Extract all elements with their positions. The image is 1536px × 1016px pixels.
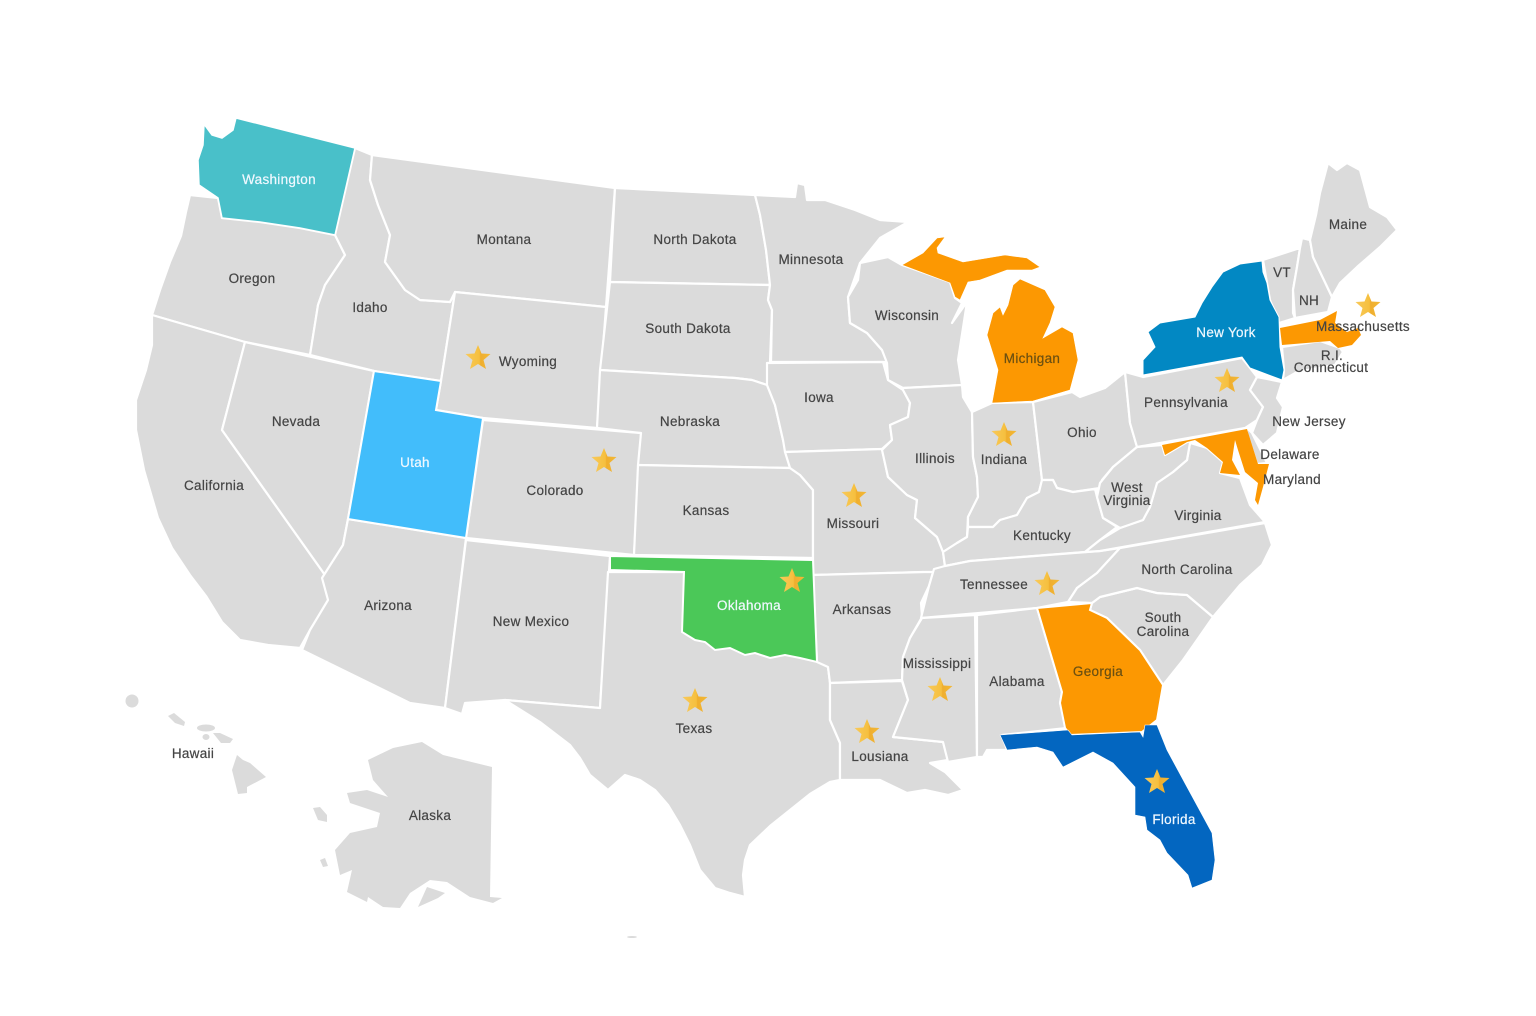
state labels: New York bbox=[1196, 325, 1256, 340]
state labels: Nevada bbox=[272, 414, 320, 429]
state labels: Indiana bbox=[981, 452, 1027, 467]
state labels: Oregon bbox=[229, 271, 275, 286]
state labels: Arkansas bbox=[833, 602, 891, 617]
state labels: Pennsylvania bbox=[1144, 395, 1228, 410]
state labels: Carolina bbox=[1137, 624, 1190, 639]
state labels: South bbox=[1145, 610, 1181, 625]
state labels: Virginia bbox=[1103, 493, 1151, 508]
state labels: New Jersey bbox=[1272, 414, 1346, 429]
state labels: Maine bbox=[1329, 217, 1367, 232]
state labels: NH bbox=[1299, 293, 1319, 308]
state labels: Hawaii bbox=[172, 746, 214, 761]
state labels: Alaska bbox=[409, 808, 451, 823]
state labels: VT bbox=[1273, 265, 1291, 280]
state labels: Lousiana bbox=[851, 749, 909, 764]
state labels: Colorado bbox=[526, 483, 584, 498]
state labels: Texas bbox=[676, 721, 712, 736]
state labels: Ohio bbox=[1067, 425, 1097, 440]
state labels: Idaho bbox=[352, 300, 388, 315]
state labels: Nebraska bbox=[660, 414, 720, 429]
stars bbox=[466, 293, 1380, 793]
state labels: North Dakota bbox=[653, 232, 737, 247]
state: Georgia bbox=[1037, 603, 1163, 735]
state: Massachusetts bbox=[1280, 311, 1361, 348]
state labels: Connecticut bbox=[1294, 360, 1368, 375]
state labels: New Mexico bbox=[493, 614, 569, 629]
state labels: Washington bbox=[242, 172, 316, 187]
state: Utah bbox=[348, 371, 483, 538]
state labels: South Dakota bbox=[645, 321, 731, 336]
state labels: Georgia bbox=[1073, 664, 1123, 679]
states: neutral gray bbox=[136, 148, 1397, 897]
state labels: Missouri bbox=[827, 516, 879, 531]
state labels: Delaware bbox=[1260, 447, 1320, 462]
state: Maryland bbox=[1162, 429, 1269, 505]
state: Oklahoma bbox=[610, 556, 817, 662]
state labels: Virginia bbox=[1174, 508, 1222, 523]
state labels: Michigan bbox=[1004, 351, 1060, 366]
state labels: Kentucky bbox=[1013, 528, 1071, 543]
state labels: Wisconsin bbox=[875, 308, 939, 323]
state labels: Montana bbox=[477, 232, 532, 247]
state: Florida bbox=[1000, 725, 1215, 888]
state: Michigan bbox=[902, 237, 1078, 403]
state labels: Mississippi bbox=[903, 656, 971, 671]
state labels: Maryland bbox=[1263, 472, 1321, 487]
state labels: Alabama bbox=[989, 674, 1045, 689]
state: Washington bbox=[198, 118, 355, 235]
state labels: Illinois bbox=[915, 451, 955, 466]
state labels bbox=[172, 172, 1410, 827]
alaska and hawaii bbox=[126, 694, 637, 938]
state labels: Wyoming bbox=[499, 354, 557, 369]
state labels: Arizona bbox=[364, 598, 412, 613]
state labels: Minnesota bbox=[778, 252, 844, 267]
state labels: California bbox=[184, 478, 244, 493]
state labels: Oklahoma bbox=[717, 598, 781, 613]
state: New York bbox=[1143, 261, 1284, 380]
state labels: North Carolina bbox=[1141, 562, 1233, 577]
state labels: R.I. bbox=[1321, 348, 1343, 363]
state labels: West bbox=[1111, 480, 1143, 495]
state labels: Iowa bbox=[804, 390, 834, 405]
state labels: Kansas bbox=[683, 503, 729, 518]
state labels: Florida bbox=[1152, 812, 1196, 827]
state labels: Tennessee bbox=[960, 577, 1028, 592]
state labels: Massachusetts bbox=[1316, 319, 1410, 334]
state labels: Utah bbox=[400, 455, 430, 470]
